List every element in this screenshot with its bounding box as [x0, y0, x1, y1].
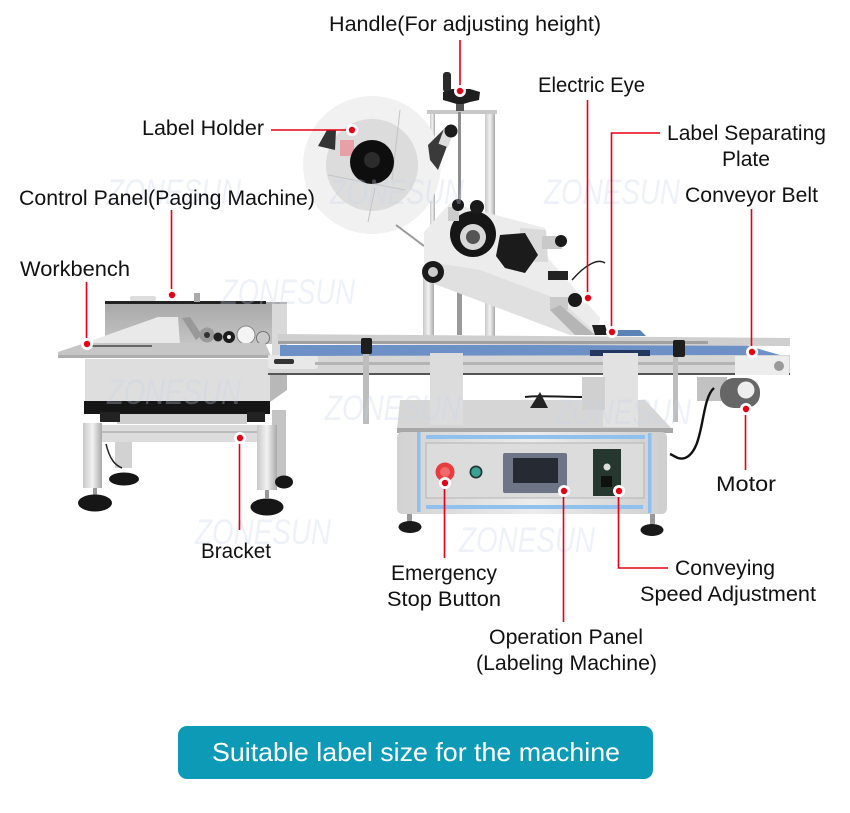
leader: electric eye — [582, 100, 594, 304]
labeling machine — [303, 72, 673, 536]
conveyor belt — [268, 334, 790, 459]
banner — [178, 726, 653, 779]
touch screen — [503, 453, 567, 493]
label: handle: Handle(For adjusting height) — [329, 13, 601, 36]
leader: motor — [740, 403, 752, 470]
label: conveying speed adjustment: Conveying — [675, 557, 775, 580]
label: operation panel: Operation Panel — [489, 626, 643, 649]
leader: control panel — [166, 210, 178, 301]
leader: bracket — [234, 432, 246, 530]
label: electric eye: Electric Eye — [538, 74, 645, 97]
base cabinet — [397, 392, 673, 514]
label: operation panel — [476, 626, 657, 675]
leader: handle — [454, 40, 466, 97]
watermarks: ZONESUN — [106, 373, 242, 412]
leader: label separating plate — [606, 133, 660, 338]
watermarks: ZONESUN — [458, 521, 596, 560]
label: conveyor belt: Conveyor Belt — [685, 184, 818, 207]
label: conveying speed adjustment: Speed Adjustment — [640, 583, 816, 606]
leader: conveying speed — [613, 485, 668, 568]
watermarks: ZONESUN — [220, 273, 356, 312]
label: emergency stop button — [387, 562, 501, 611]
handle knob — [443, 72, 480, 111]
banner: Suitable label size for the machine — [212, 737, 620, 767]
watermarks — [106, 173, 692, 560]
feeder ramp — [93, 317, 180, 345]
bracket — [83, 410, 286, 490]
end pulley — [735, 356, 789, 375]
label: motor: Motor — [716, 473, 776, 496]
indicator button — [470, 466, 482, 478]
side frame — [268, 355, 790, 375]
cabinet feet — [398, 514, 664, 536]
label: control panel: Control Panel(Paging Machine) — [19, 187, 315, 210]
label: conveying speed adjustment — [640, 557, 816, 606]
leader: workbench — [81, 282, 93, 350]
watermarks: ZONESUN — [329, 173, 465, 212]
leader: emergency stop — [439, 477, 451, 558]
leader: label holder — [271, 124, 358, 136]
watermarks: ZONESUN — [194, 513, 332, 552]
watermarks: ZONESUN — [543, 173, 681, 212]
label: label separating plate: Plate — [722, 148, 770, 171]
label: label separating plate: Label Separating — [667, 122, 826, 145]
workbench plate — [58, 343, 272, 358]
paging machine back box — [105, 293, 287, 359]
watermarks: ZONESUN — [106, 173, 242, 212]
watermarks: ZONESUN — [324, 389, 462, 428]
paging machine body — [84, 359, 287, 424]
label: operation panel: (Labeling Machine) — [476, 652, 657, 675]
top rail — [278, 334, 790, 346]
emergency stop button — [436, 462, 454, 482]
blue belt — [280, 345, 780, 356]
labeling head — [422, 199, 646, 336]
watermarks: ZONESUN — [554, 393, 692, 432]
rail clamps — [361, 338, 685, 424]
label: bracket: Bracket — [201, 540, 271, 563]
leader: operation panel — [558, 485, 570, 622]
motor — [670, 377, 760, 459]
label: label holder: Label Holder — [142, 117, 264, 140]
paging machine — [58, 293, 293, 516]
bracket feet — [78, 472, 293, 516]
label: workbench: Workbench — [20, 258, 130, 281]
rollers — [182, 317, 270, 344]
uprights — [430, 353, 638, 427]
support columns — [423, 110, 497, 337]
label: emergency stop button: Emergency — [391, 562, 497, 585]
label roll — [303, 96, 458, 246]
label: label separating plate — [667, 122, 826, 171]
speed control panel — [593, 449, 621, 496]
leader: conveyor belt — [746, 209, 758, 358]
label: emergency stop button: Stop Button — [387, 588, 501, 611]
